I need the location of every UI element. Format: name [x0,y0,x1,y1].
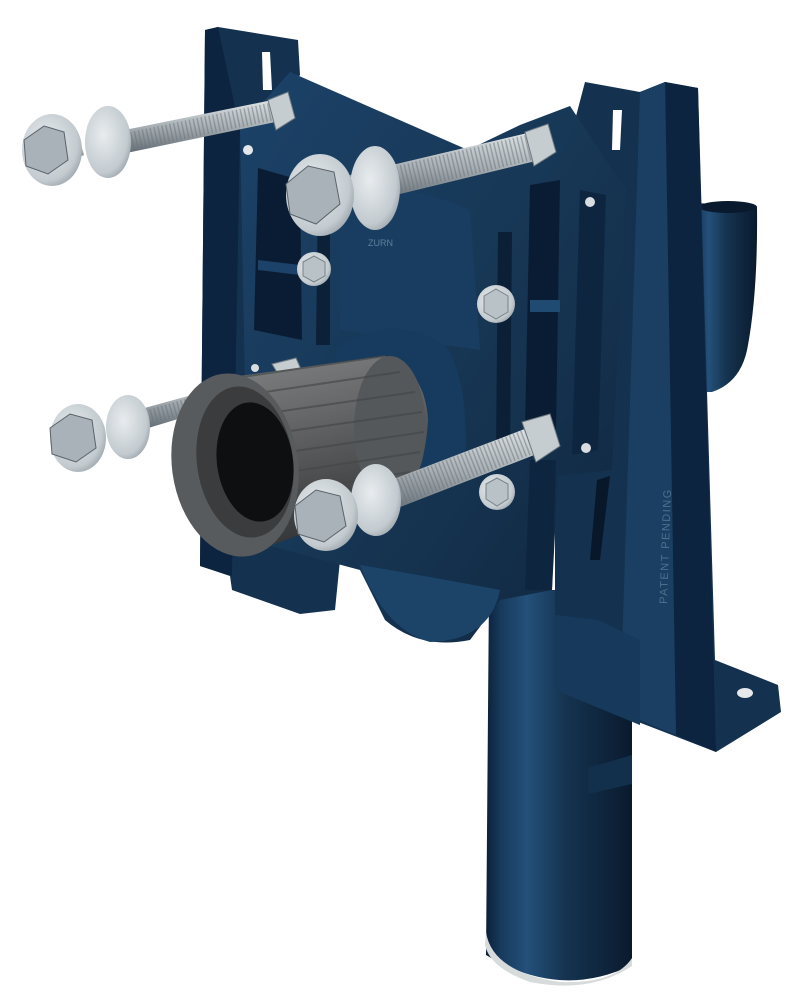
vertical drain pipe [485,590,632,986]
small mounting bolts [297,252,515,510]
elbow outlet pipe [690,201,757,392]
threaded rod: lower left [50,358,304,472]
embossed text: PATENT PENDING [658,488,674,604]
threaded rod: top left [22,92,295,186]
threaded rod: lower right [294,414,560,551]
threaded sleeve [160,356,428,565]
threaded rod: top right [286,124,556,236]
embossed logo: ZURN [368,238,393,248]
right mounting bracket with foot [555,82,781,752]
left mounting bracket [200,27,340,614]
main cast carrier plate [240,72,626,642]
